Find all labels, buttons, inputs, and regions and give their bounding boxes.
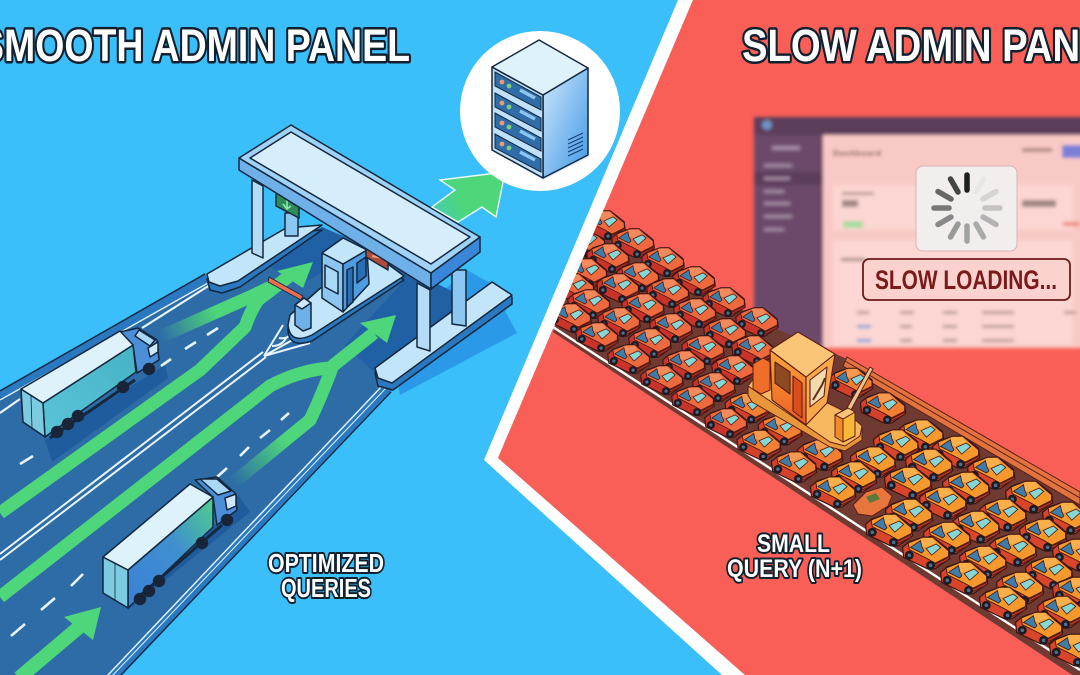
toll island: centre (288, 248, 404, 343)
label: optimized queries: QUERIES (281, 573, 371, 603)
broken down car (853, 487, 892, 516)
small booth side post (748, 358, 862, 451)
icon: red stop sign (366, 242, 388, 270)
server rack slots (495, 72, 541, 172)
guard rail (843, 357, 1080, 505)
canopy ground shadow (388, 270, 517, 395)
server lights (500, 80, 511, 150)
jammed cars (549, 211, 1080, 667)
highway road surface (0, 227, 420, 675)
label: small query n+1: SMALL (757, 530, 830, 558)
traffic jam scene (549, 211, 1080, 675)
road shadow under canopy (262, 227, 470, 385)
label: small query n+1 (727, 530, 862, 583)
road upper kerb (0, 277, 207, 395)
orange toll booth (770, 332, 835, 425)
toll gate post (295, 298, 311, 331)
panel: blurred admin dashboard (754, 117, 1080, 348)
panel: white diagonal divider (484, 0, 745, 675)
green lane arrow: lower lane (0, 333, 374, 597)
panel: slow admin panel background (498, 0, 1080, 675)
road lower kerb (113, 387, 388, 675)
toll canopy roof (239, 125, 480, 289)
toll gate arm and post (835, 367, 873, 442)
loading spinner card (916, 166, 1017, 251)
green lane arrow: bottom (19, 607, 101, 675)
toll island: right (375, 282, 512, 390)
panel: highway scene (0, 125, 517, 675)
front canopy pillars (252, 180, 430, 351)
toll island: left (207, 225, 322, 293)
arrow: toll to server (432, 172, 505, 222)
panel: blurred admin dashboard: Dashboard (833, 149, 881, 158)
icon: spinner (934, 175, 1000, 241)
toll gate barrier arm (268, 277, 303, 300)
toll booth (322, 238, 369, 312)
truck: upper lane (21, 328, 168, 462)
icon: server in white circle (460, 31, 620, 191)
label: optimized queries (268, 548, 384, 603)
label: slow loading badge (863, 259, 1070, 300)
truck: lower lane (103, 477, 250, 610)
icon: green go sign (276, 188, 299, 218)
label: small query n+1: QUERY (N+1) (727, 555, 862, 583)
road lane markings (0, 285, 210, 413)
rear canopy pillars (285, 213, 466, 326)
road surface (553, 212, 1080, 675)
green lane arrow: upper lane (0, 274, 292, 513)
label: optimized queries: OPTIMIZED (268, 548, 384, 578)
